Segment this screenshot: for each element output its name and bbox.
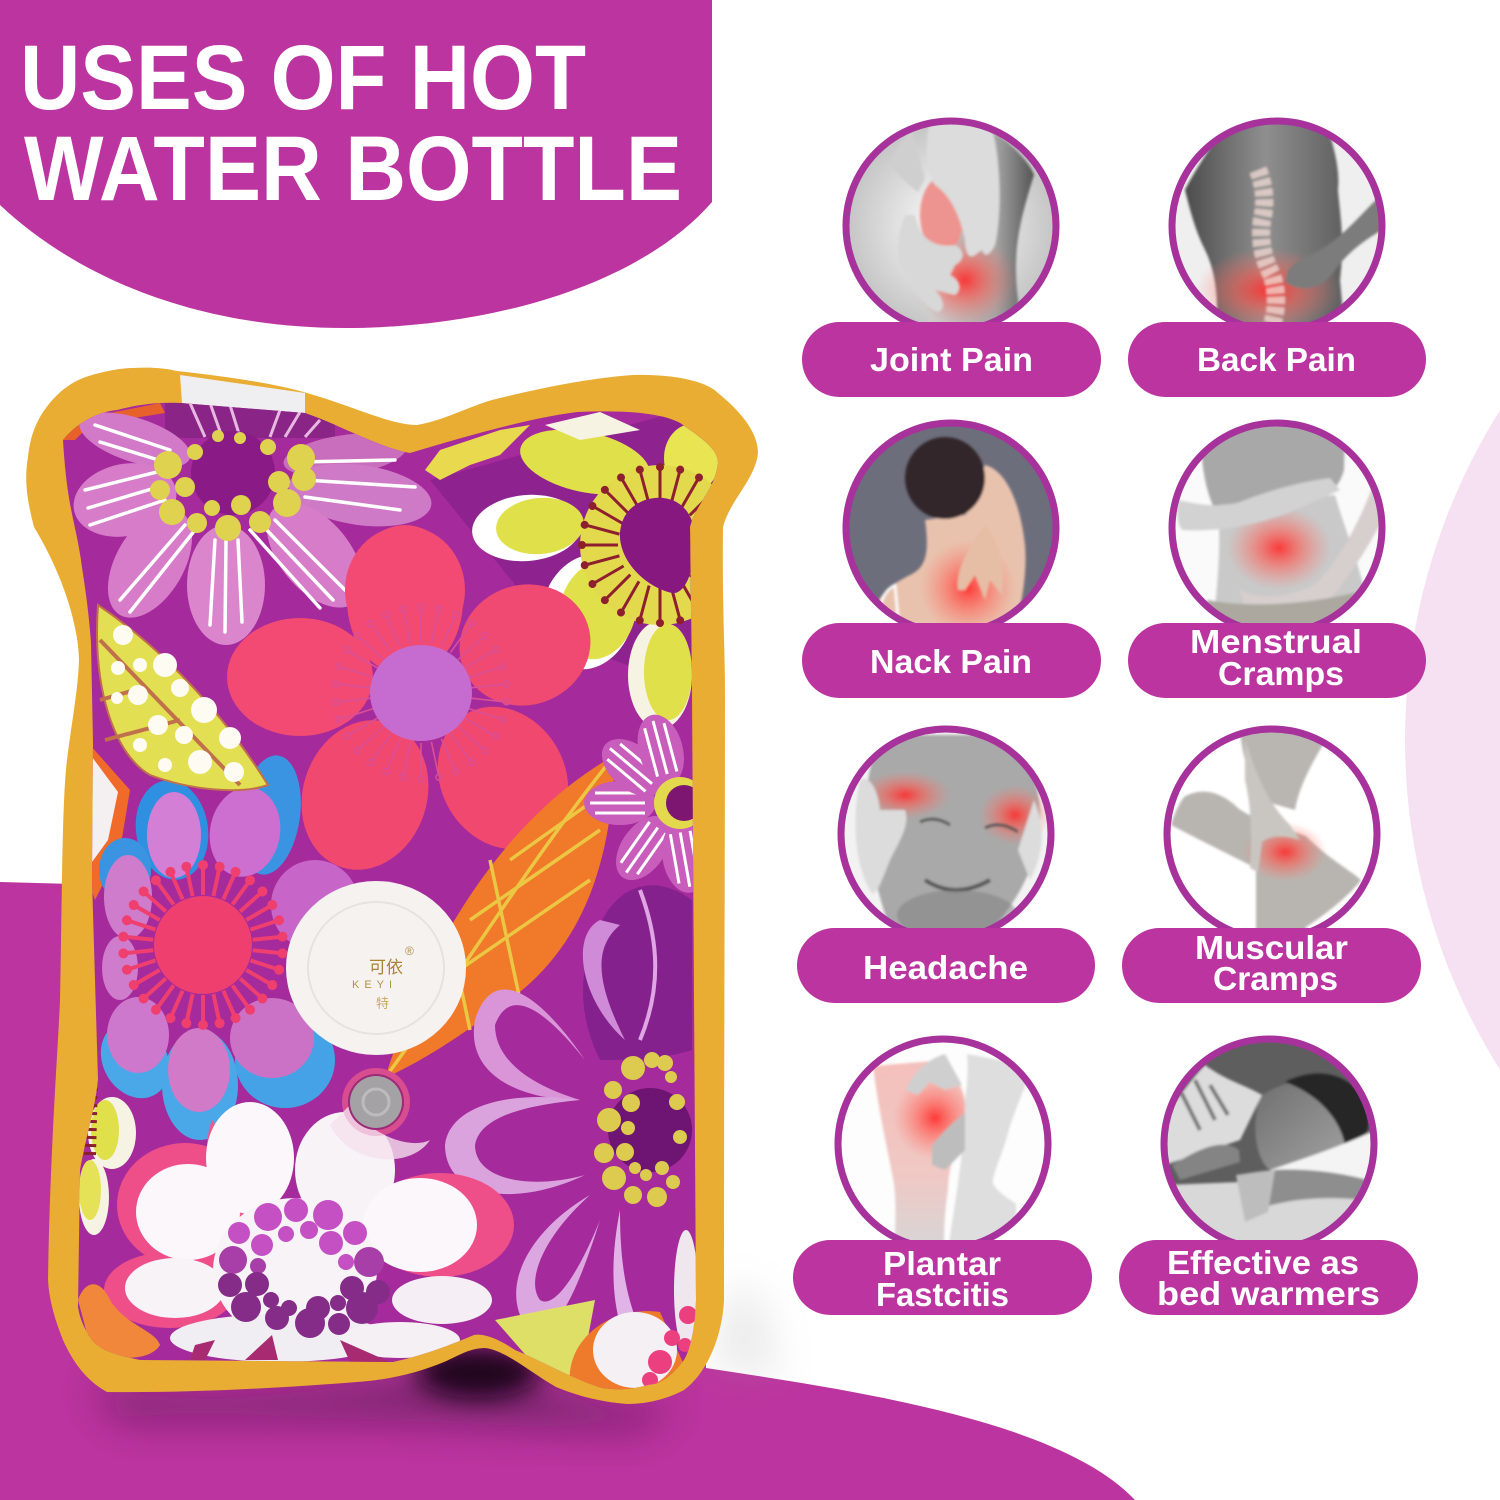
- flower: coral pink: [227, 525, 606, 886]
- circle ring: [1172, 121, 1382, 331]
- card: headache: [797, 728, 1095, 1003]
- card: back pain: [1128, 118, 1426, 397]
- card: plantar fasciitis: [793, 1038, 1092, 1315]
- white and orange strip left edge: [92, 748, 130, 900]
- photo: heel with pain: [872, 1053, 1026, 1240]
- photo: woman holding neck: [850, 426, 1052, 623]
- label text: Cramps: [1213, 960, 1338, 997]
- white plug cap: 特: [376, 996, 389, 1011]
- gathered stripes at top: [165, 403, 335, 438]
- label text: Cramps: [1218, 655, 1344, 692]
- label text: Headache: [863, 949, 1028, 986]
- flower fragment left yellow: [79, 1080, 136, 1235]
- label text: [876, 1245, 1009, 1313]
- flower: striped small right: [584, 714, 694, 893]
- label text: Muscular: [1195, 929, 1348, 966]
- label text: Nack Pain: [870, 643, 1032, 680]
- label pill: [1119, 1240, 1418, 1315]
- label text: bed warmers: [1157, 1275, 1380, 1312]
- label text: Effective as: [1167, 1244, 1359, 1281]
- white plug cap: KEYI: [352, 979, 397, 991]
- photo: abdomen held by hands: [1176, 426, 1378, 623]
- circle ring: [838, 1039, 1048, 1249]
- label text: [1195, 929, 1348, 997]
- photo: man with headache: [844, 732, 1048, 928]
- floral printed fabric: [50, 390, 740, 1400]
- yellow flower fragment near top: [425, 425, 530, 480]
- flower: pink with blue edges: [87, 751, 359, 1140]
- label text: Menstrual: [1190, 623, 1362, 660]
- label pill: [1122, 928, 1421, 1003]
- white and orange flower at bottom right: [570, 1230, 700, 1400]
- label pill: [1128, 322, 1426, 397]
- hot water bottle: [26, 368, 758, 1404]
- flower: lilac striped: [67, 401, 435, 645]
- label pill: [802, 623, 1101, 698]
- photo: man sleeping: [1168, 1042, 1370, 1240]
- circle ring: [841, 729, 1051, 939]
- title: [20, 27, 682, 220]
- white plug cap: 可依: [369, 958, 403, 977]
- bottle yellow fabric border: [26, 368, 758, 1404]
- card: menstrual cramps: [1128, 422, 1426, 698]
- white bottle tag: [180, 375, 305, 414]
- label text: Fastcitis: [876, 1276, 1009, 1313]
- label text: Plantar: [883, 1245, 1001, 1282]
- card: joint pain: [802, 120, 1101, 397]
- yellow patterned leaf at bottom: [495, 1300, 595, 1380]
- circle ring: [1167, 729, 1377, 939]
- label pill: [797, 928, 1095, 1003]
- label text: [1157, 1244, 1380, 1312]
- top purple header shape: [0, 0, 712, 328]
- orange shape bottom left: [78, 1284, 160, 1358]
- label text: [1190, 623, 1362, 692]
- photo: knee held by hands: [850, 124, 1052, 322]
- card: neck pain: [802, 422, 1101, 698]
- yellow leaf with white dots: [97, 605, 268, 790]
- flower: purple with lilac crescents: [445, 885, 692, 1350]
- bottom purple background shape: [0, 882, 1135, 1500]
- label text: Back Pain: [1197, 341, 1356, 378]
- title: WATER BOTTLE: [24, 118, 682, 220]
- photo: calf held by hand: [1171, 732, 1362, 928]
- card: muscular cramps: [1122, 725, 1421, 1003]
- label pill: [793, 1240, 1092, 1315]
- card: bed warmers: [1119, 1039, 1418, 1315]
- decorative pale pink circle at right: [1405, 120, 1500, 1360]
- title: USES OF HOT: [20, 27, 586, 129]
- circle ring: [846, 423, 1056, 633]
- circle ring: [1164, 1039, 1374, 1249]
- metal valve button: [330, 1068, 430, 1159]
- label text: Joint Pain: [870, 341, 1033, 378]
- white plug cap: [286, 881, 466, 1055]
- orange leaf: [385, 755, 615, 1078]
- photo: back with spine: [1176, 124, 1378, 322]
- circle ring: [846, 121, 1056, 331]
- label pill: [802, 322, 1101, 397]
- white plug cap: ®: [405, 944, 414, 958]
- soft shadow under bottle: [90, 1290, 780, 1430]
- flower: white with pink rim and purple dots: [104, 1102, 514, 1362]
- orange band top left: [63, 403, 165, 440]
- label pill: [1128, 623, 1426, 698]
- circle ring: [1172, 423, 1382, 633]
- flower: yellow and white top right: [472, 412, 718, 725]
